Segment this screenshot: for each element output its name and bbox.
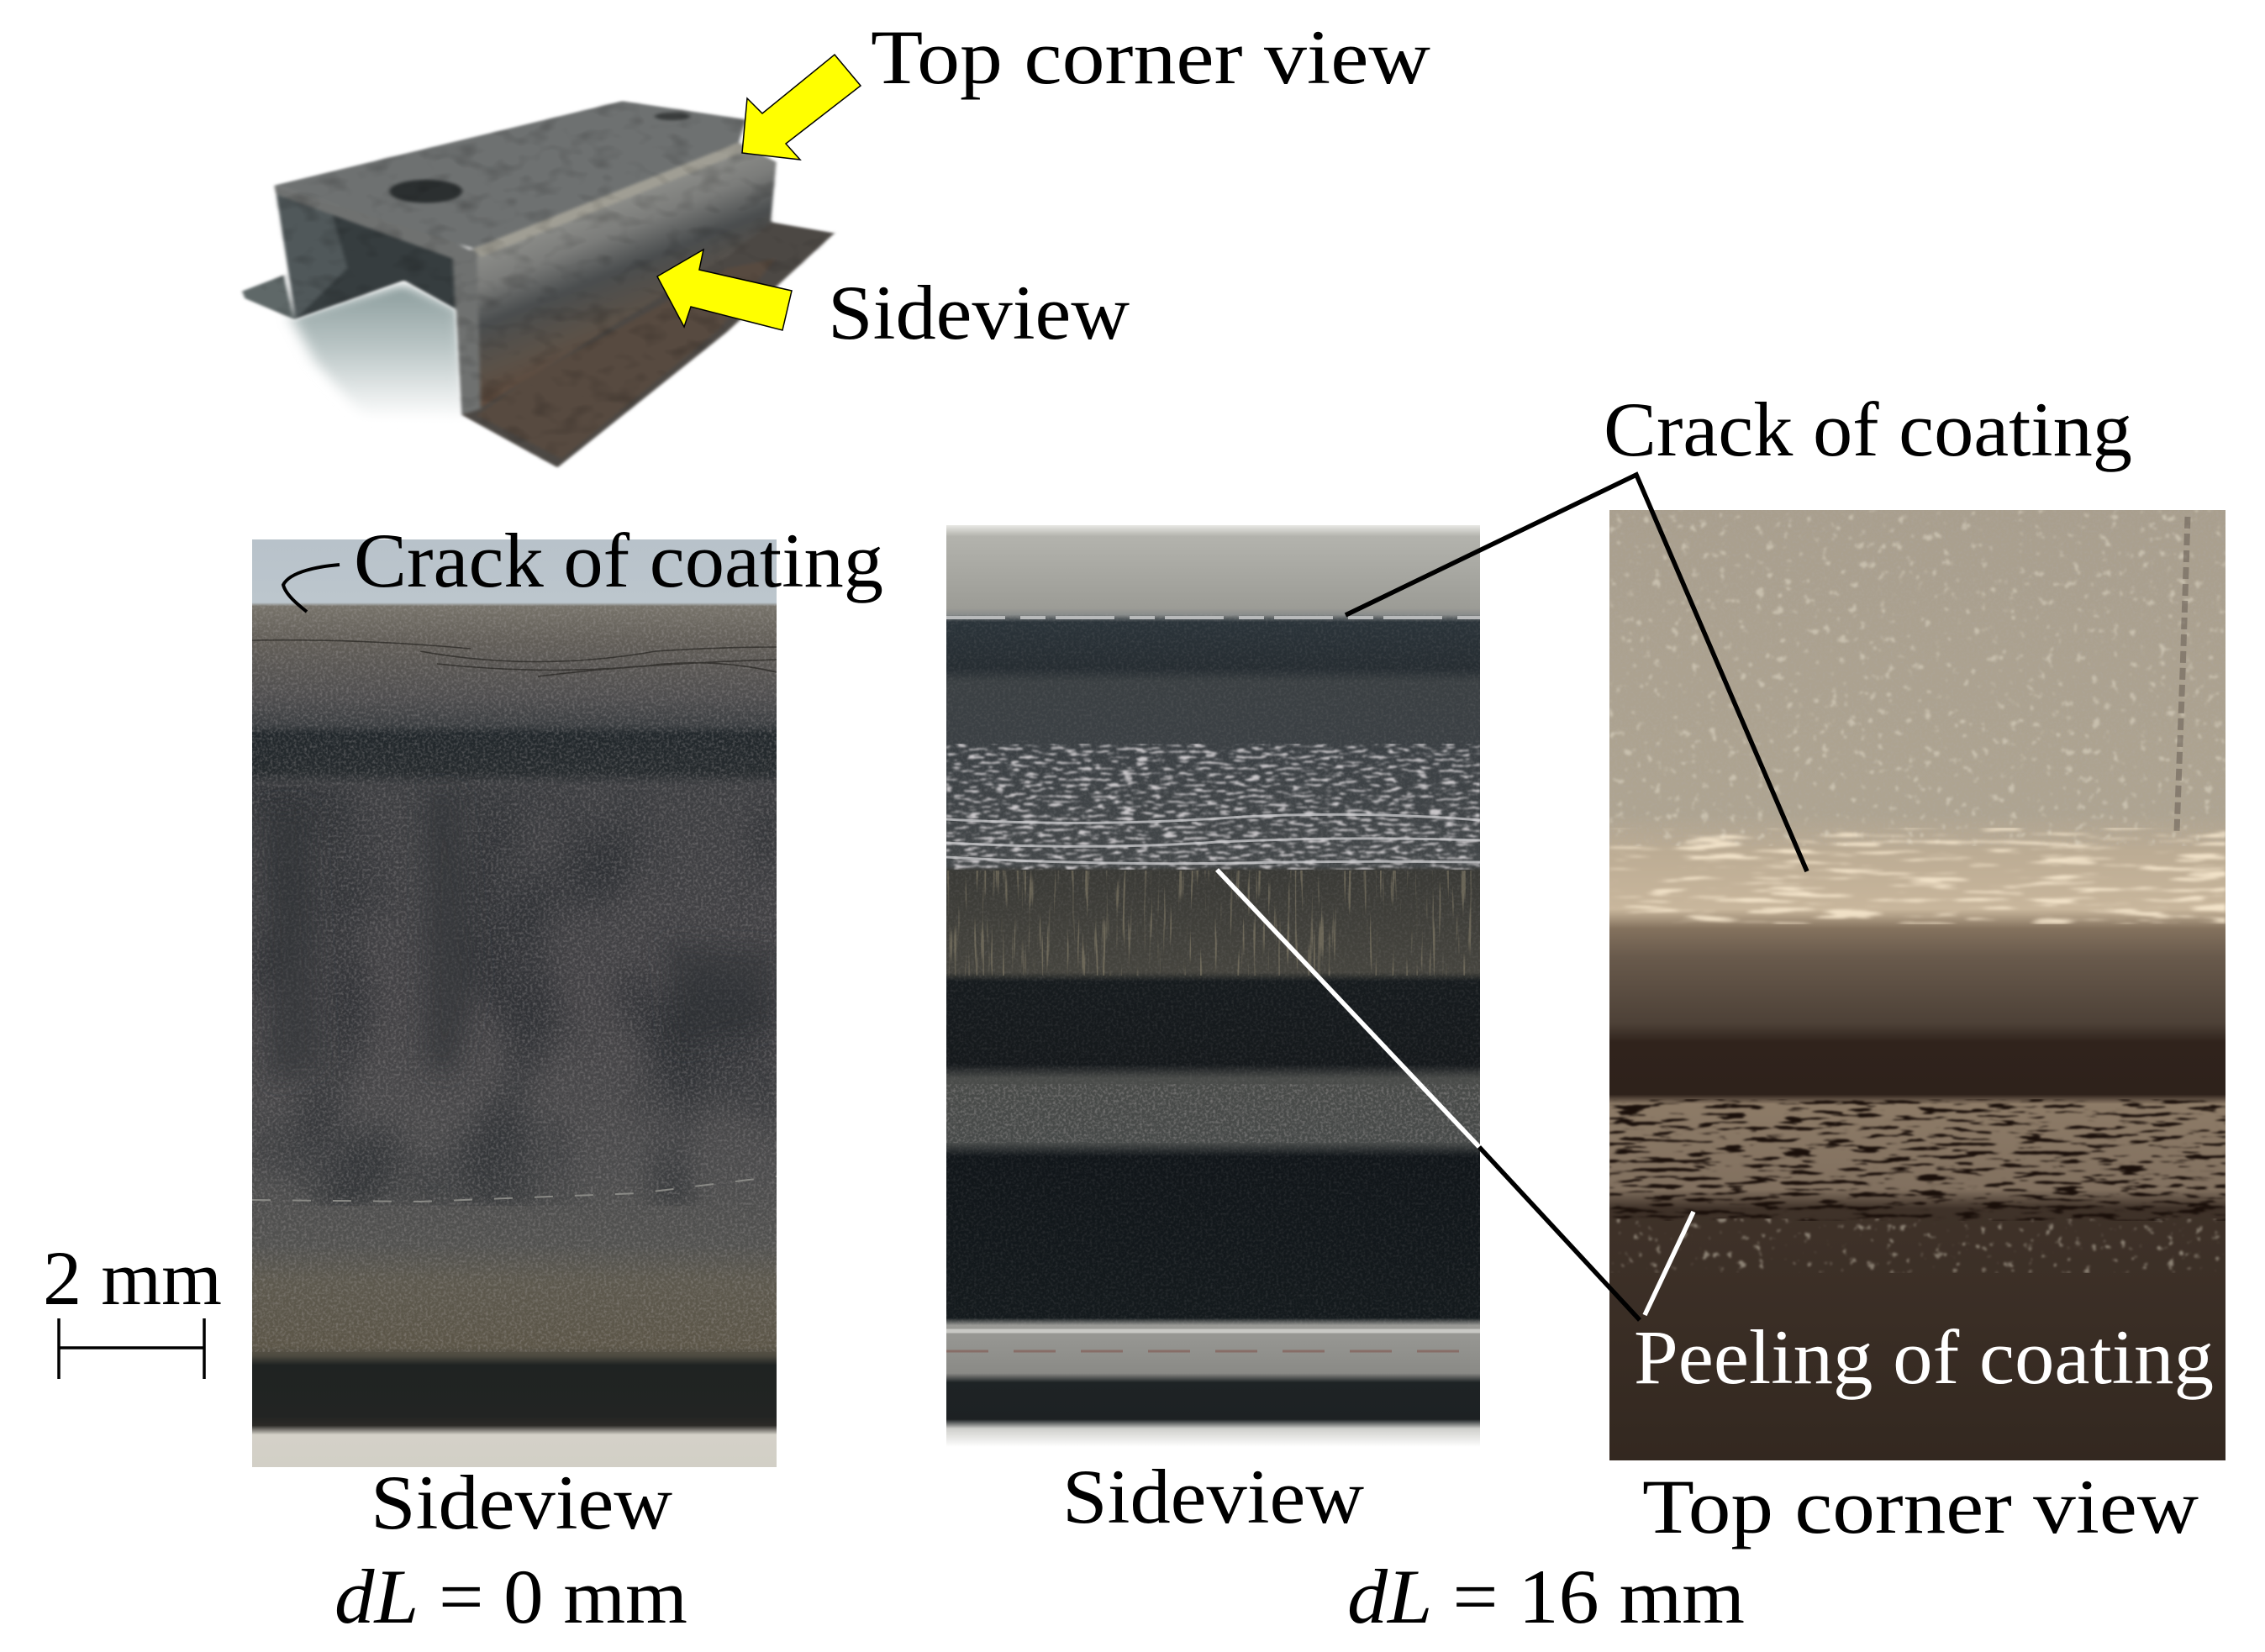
mottled band [946,1084,1480,1143]
label: sideview: Sideview [828,270,1130,355]
arrow: top corner view [742,55,861,160]
leader lines: peeling of coating [1217,870,1693,1320]
vertical marks [946,871,1480,976]
caption: top corner view dL 16: Top corner view [1642,1464,2199,1549]
panel: dL 16 sideview photo [946,525,1480,1447]
label: peeling of coating: Peeling of coating [1634,1314,2214,1400]
leader lines: crack of coating [1346,475,1807,871]
bright scratch line [252,1176,777,1202]
callout: crack of coating (left): Crack of coating [354,518,883,603]
label: crack of coating (right): Crack of coating [1604,387,2132,472]
caption: sideview dL 0: Sideview [371,1460,673,1545]
dark vertical stain [261,790,777,1084]
fine flake lines [946,814,1480,864]
caption: sideview dL 16: Sideview [1062,1454,1365,1539]
pencil mark [2177,517,2188,832]
panel: dL 16 top corner view photo [1609,510,2225,1460]
peeled streaks [1609,1099,2225,1221]
caption: dL = 16 mm: dL = 16 mm [1347,1554,1745,1639]
peeled coating flakes [946,744,1480,870]
lit lower edge [946,1349,1480,1353]
label: top corner view: Top corner view [871,14,1431,100]
caption: dL = 0 mm: dL = 0 mm [334,1554,687,1639]
arrow: sideview [657,250,792,330]
scale bar: 2 mm [43,1235,222,1379]
crack lines [252,640,777,676]
floor shadow [291,284,469,420]
panel: dL 0 sideview photo [252,539,777,1467]
photo: channel specimen [241,100,836,469]
scale bar: 2 mm: 2 mm [43,1235,222,1321]
bright bent edge [1609,828,2225,924]
silver top edge [946,616,1480,619]
